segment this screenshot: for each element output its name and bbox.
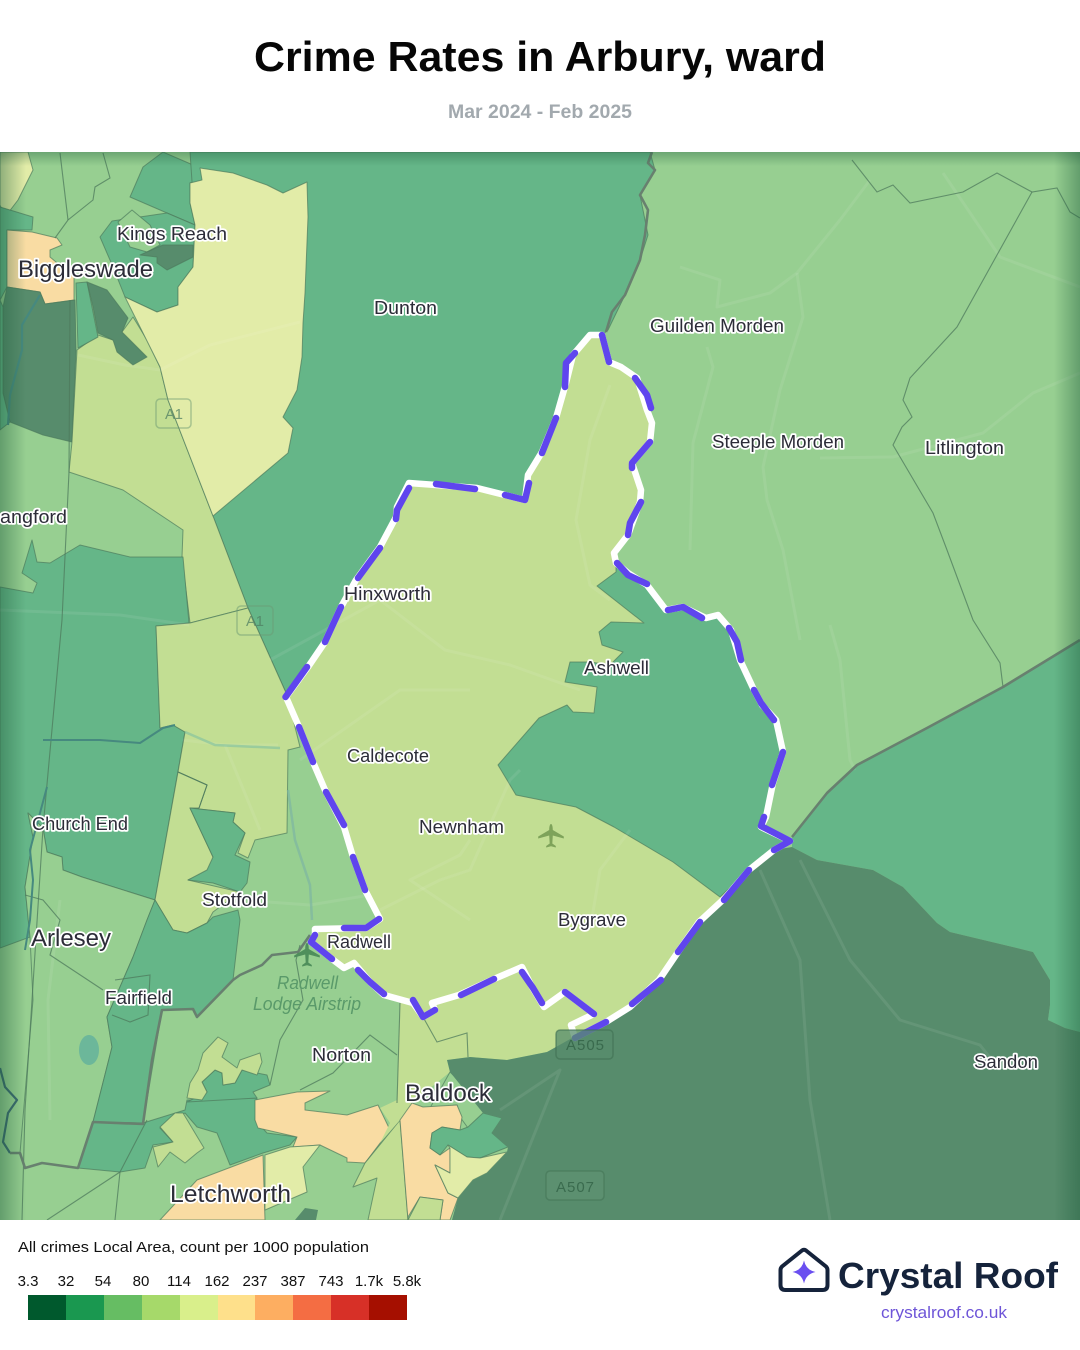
legend scale numbers: 162 [204,1273,230,1290]
legend colour bar [28,1295,407,1320]
place name labels: Norton [312,1044,371,1065]
place name labels: Caldecote [347,745,429,766]
pale yellow area by Kings Reach [125,168,308,516]
place name labels: Hinxworth [344,583,431,604]
airstrip label: Lodge Airstrip [253,994,361,1014]
mid green area east [792,640,1080,1032]
icon: house with star [780,1250,828,1290]
logo: Crystal Roof [778,1248,1059,1322]
place name labels: Arlesey [31,925,112,952]
place name labels: Radwell [327,931,391,952]
road shields: A1 [165,406,183,423]
place name labels: Fairfield [105,987,172,1008]
legend [18,1239,422,1320]
place name labels: Ashwell [584,657,649,678]
Fairfield mid green strip [93,900,240,1124]
place name labels: Sandon [974,1051,1038,1072]
icon: airfield plane Radwell [294,943,320,966]
Letchworth patches [78,1037,408,1220]
vignette edges [0,152,1080,1220]
dark green area south-east [447,847,1080,1220]
road shields: A1 [246,613,264,630]
airstrip label [253,973,361,1014]
place name labels: Bygrave [558,909,626,930]
Stotfold areas [155,772,250,933]
website link text: crystalroof.co.uk [881,1303,1008,1322]
place name labels: Letchworth [170,1181,291,1208]
legend scale numbers: 387 [280,1273,306,1290]
legend scale numbers: 32 [58,1273,74,1290]
airstrip label: Radwell [277,973,339,993]
place name labels: Guilden Morden [650,315,784,336]
logo wordmark: Crystal Roof [838,1255,1059,1296]
road shields: A505 [566,1037,604,1054]
legend scale numbers: 1.7k [355,1273,384,1290]
place name labels: Biggleswade [18,256,153,283]
ward fill yellow-green [287,335,790,1038]
mid green area around Church End [0,540,189,1168]
road shields [156,399,613,1200]
place name labels: Dunton [374,297,437,318]
place name labels: angford [0,506,67,527]
legend scale numbers: 54 [95,1273,111,1290]
place name labels: Newnham [419,816,504,837]
legend scale numbers: 3.3 [18,1273,38,1290]
mid green area around Dunton [190,152,655,695]
dark patch and strip by Biggleswade [76,282,147,365]
place name labels: Litlington [925,437,1004,458]
base light green areas [0,152,1080,1220]
yellow-green area south of A1 [156,608,300,858]
legend scale numbers: 5.8k [393,1273,422,1290]
place name labels: Baldock [405,1080,492,1107]
Ashwell mid green area [498,563,790,897]
Baldock patches [380,967,606,1220]
road shields: A507 [556,1179,594,1196]
legend scale numbers: 237 [242,1273,268,1290]
yellow-green area west of the A1 [69,317,248,623]
legend scale numbers: 80 [133,1273,149,1290]
north-west areas [0,152,202,442]
roads, waterways and minor boundaries [0,152,1080,1220]
title: Crime Rates in Arbury, ward [254,33,826,80]
legend scale numbers [18,1273,422,1290]
ward boundary: white line with purple dashes [286,335,790,1038]
choropleth map panel [0,152,1080,1220]
legend scale numbers: 114 [167,1273,191,1290]
place name labels: Church End [32,813,128,834]
place name labels: Kings Reach [117,223,227,244]
place name labels [0,223,1038,1208]
subtitle: date range: Mar 2024 - Feb 2025 [448,102,632,123]
place name labels: Steeple Morden [712,431,844,452]
place name labels: Stotfold [202,889,267,910]
icon: airfield plane Bygrave [538,824,564,848]
legend scale numbers: 743 [318,1273,344,1290]
legend title: All crimes Local Area, count per 1000 population [18,1239,369,1256]
